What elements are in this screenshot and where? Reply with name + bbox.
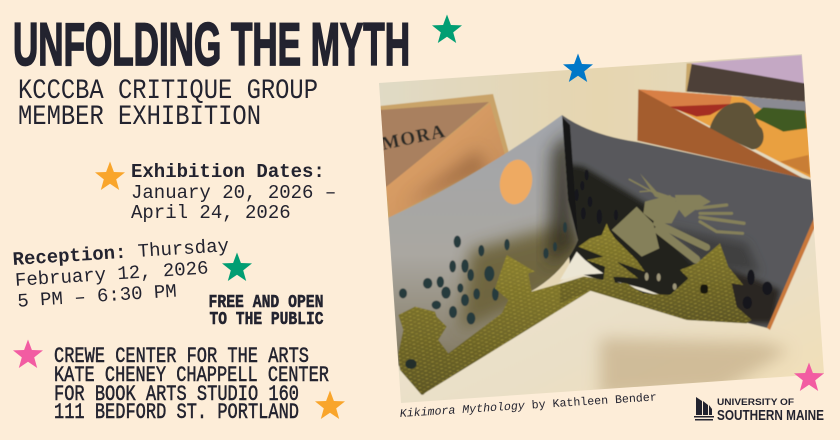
icon: green star near title	[432, 14, 462, 43]
subtitle: KCCCBA CRITIQUE GROUP	[18, 76, 318, 107]
gray book left panel	[388, 115, 578, 395]
gray book right panel	[555, 110, 820, 335]
icon: blue star	[563, 54, 593, 82]
icon: logo sails	[694, 397, 714, 420]
photo: pop-up book	[370, 50, 830, 410]
free admission note: TO THE PUBLIC	[210, 310, 324, 330]
reception details: Reception: Thursday	[12, 235, 230, 271]
address: CREWE CENTER FOR THE ARTS	[54, 344, 309, 369]
logo: University of Southern Maine	[694, 397, 824, 424]
back left book	[378, 94, 510, 230]
exhibition dates	[131, 161, 336, 224]
reception details: February 12, 2026	[14, 257, 209, 292]
address: FOR BOOK ARTS STUDIO 160	[54, 382, 299, 407]
front forest cut-out: right part	[560, 223, 752, 323]
back right book	[637, 55, 812, 178]
icon: pink star near address	[13, 340, 43, 368]
exhibition dates: Exhibition Dates:	[131, 161, 325, 183]
reception details: 5 PM – 6:30 PM	[17, 281, 177, 313]
address: KATE CHENEY CHAPPELL CENTER	[54, 363, 329, 388]
exhibition dates: January 20, 2026 –	[131, 182, 336, 204]
free admission note: FREE AND OPEN	[208, 293, 324, 313]
icon: orange star	[95, 162, 125, 190]
forest wash	[460, 225, 585, 330]
address	[54, 344, 329, 425]
free admission note	[208, 293, 324, 330]
photo caption: Kikimora Mythology by Kathleen Bender	[399, 391, 657, 421]
dark leaf marks: right panel	[575, 170, 772, 309]
back left book: MORA	[380, 121, 447, 155]
moon	[499, 159, 533, 205]
logo: University of Southern Maine: UNIVERSITY OF	[717, 397, 794, 407]
address: 111 BEDFORD ST. PORTLAND	[54, 400, 299, 425]
subtitle	[18, 76, 318, 133]
subtitle: MEMBER EXHIBITION	[18, 102, 261, 133]
exhibition dates: April 24, 2026	[131, 202, 291, 224]
monster figure	[612, 173, 744, 259]
front forest cut-out: left part	[398, 255, 596, 395]
icon: orange star near address	[315, 390, 345, 419]
icon: green star near reception	[222, 252, 252, 281]
icon: pink star on photo	[794, 362, 824, 391]
table seen through the cut-outs	[560, 252, 603, 280]
dark leaf marks	[399, 222, 567, 324]
reception details	[12, 235, 232, 313]
title: UNFOLDING THE MYTH	[13, 11, 410, 78]
